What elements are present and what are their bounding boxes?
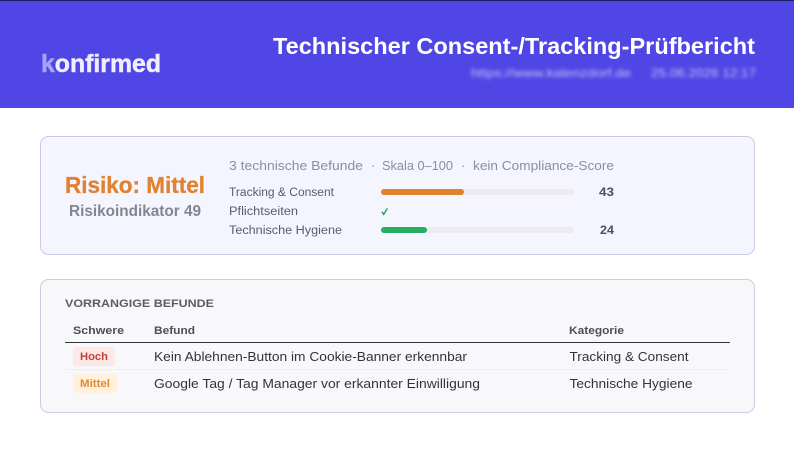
summary line: · — [371, 158, 375, 173]
row: Mittel finding: Technische Hygiene — [570, 377, 693, 391]
risk level heading: Risiko: Mittel — [65, 172, 205, 198]
table header: Befund — [154, 325, 195, 337]
summary line: 3 technische Befunde — [229, 158, 363, 173]
row: Hoch finding — [73, 347, 689, 366]
row: Pflichtseiten: Pflichtseiten — [229, 206, 298, 218]
table header — [73, 325, 624, 337]
badge: Mittel: Mittel — [80, 378, 110, 390]
badge: Hoch: Hoch — [80, 351, 108, 363]
row: Tracking & Consent — [229, 187, 614, 199]
section heading: VORRANGIGE BEFUNDE — [65, 298, 214, 310]
summary line: Skala 0–100 — [382, 158, 453, 173]
risk indicator: Risikoindikator 49 — [69, 203, 201, 220]
table header: Kategorie — [569, 325, 624, 337]
row: Mittel finding — [73, 374, 693, 393]
row: Pflichtseiten — [229, 206, 387, 218]
row: Mittel finding: Google Tag / Tag Manager vor erkannter Einwilligung — [154, 377, 480, 391]
badge: Mittel — [73, 374, 117, 393]
table header: Schwere — [73, 325, 124, 337]
row: Hoch finding: Tracking & Consent — [570, 350, 689, 364]
row: Technische Hygiene — [229, 225, 615, 237]
icon: check mark — [382, 208, 387, 214]
report title: Technischer Consent-/Tracking-Prüfbericht — [273, 33, 755, 59]
blurred URL and date: 25.06.2026 12:17 — [651, 66, 756, 80]
badge: Hoch — [73, 347, 115, 366]
row: Technische Hygiene: Technische Hygiene — [229, 225, 342, 237]
panel: priority findings — [40, 280, 754, 412]
header banner — [0, 0, 794, 108]
summary line — [229, 158, 614, 173]
summary line: · — [461, 158, 465, 173]
blurred URL and date: https://www.kalenzdorf.de — [471, 66, 631, 80]
logo: konfirmed: konfirmed — [41, 50, 161, 78]
row: Hoch finding: Kein Ablehnen-Button im Cookie-Banner erkennbar — [154, 350, 467, 364]
row: Tracking & Consent: Tracking & Consent — [229, 187, 335, 199]
row: Tracking & Consent: 43 — [599, 187, 614, 199]
summary line: kein Compliance-Score — [473, 158, 614, 173]
blurred URL and date — [471, 66, 756, 80]
panel: risk summary — [40, 136, 754, 254]
row: Technische Hygiene: 24 — [600, 225, 615, 237]
